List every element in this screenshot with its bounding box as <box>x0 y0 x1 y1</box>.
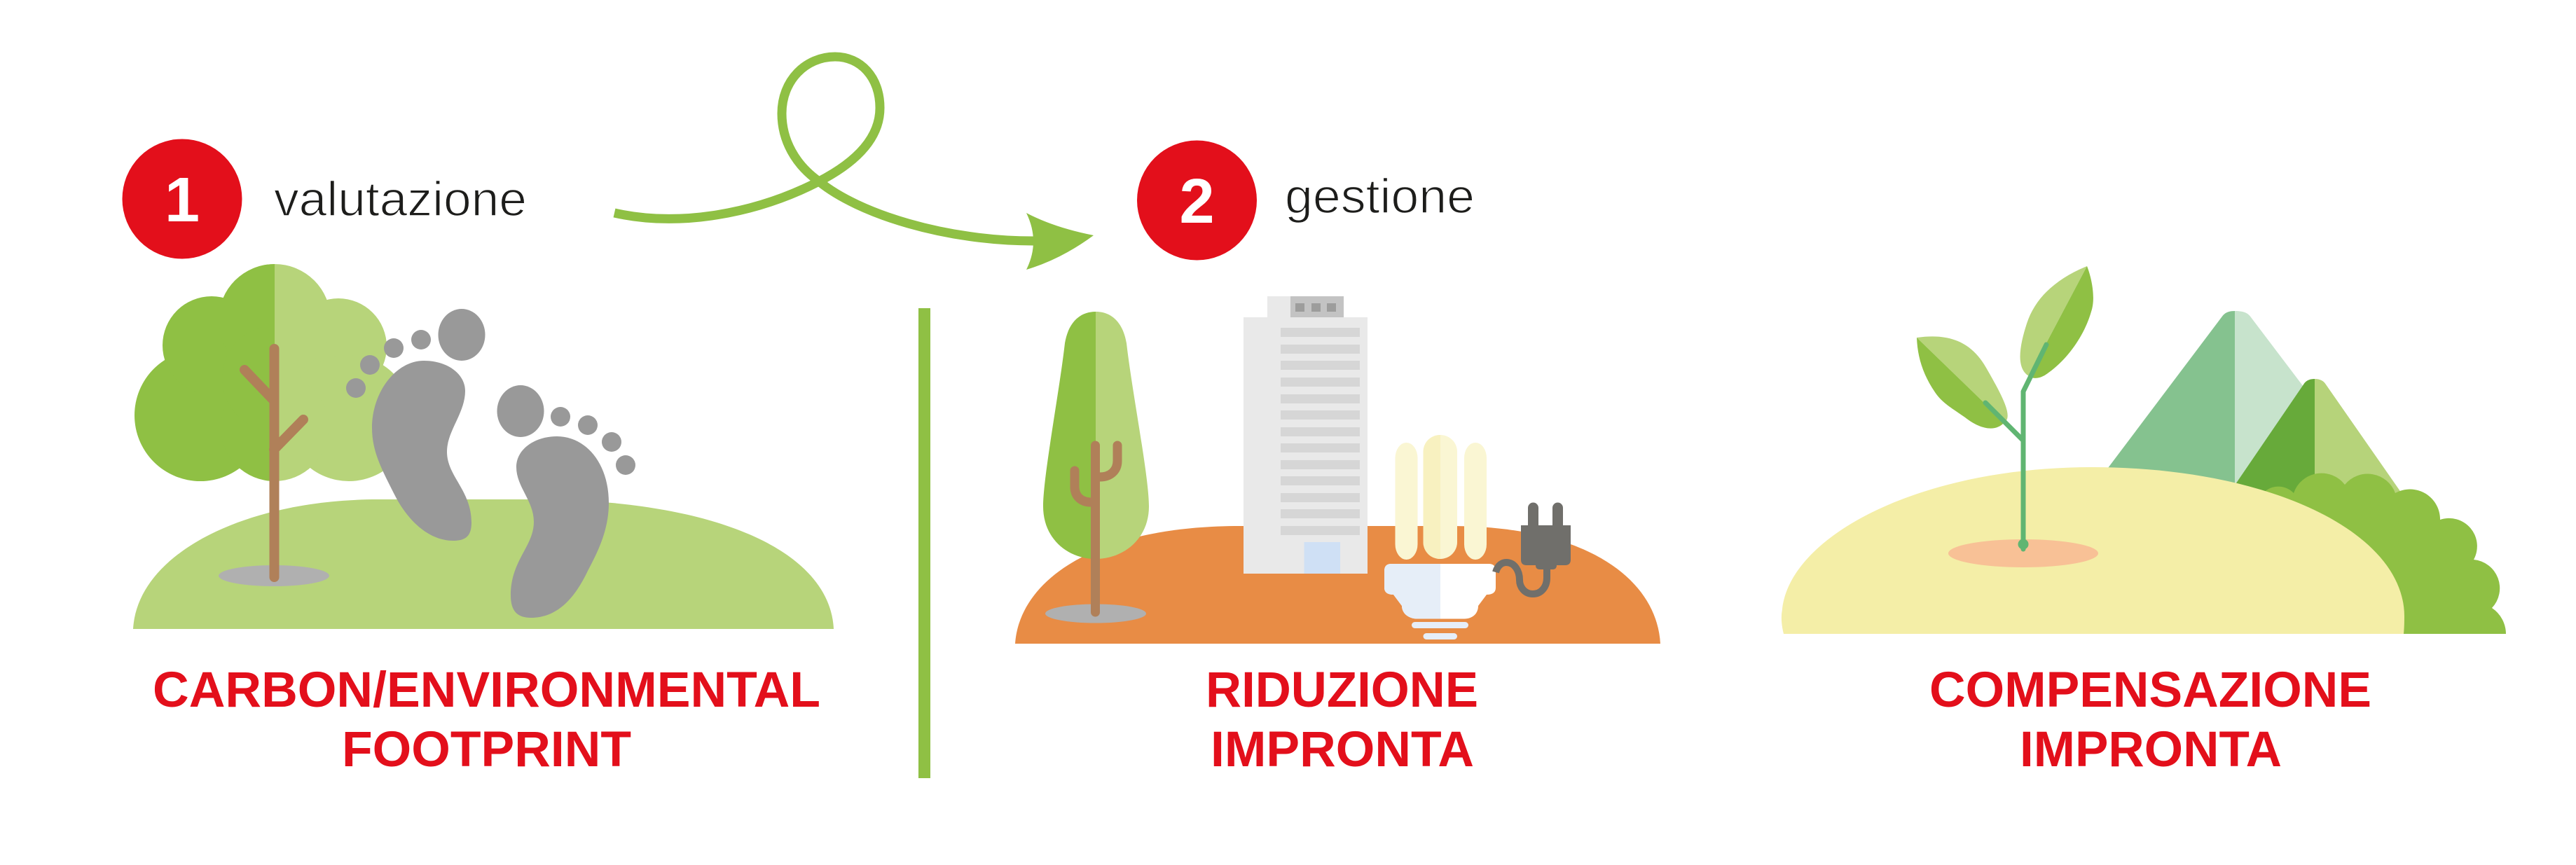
icon: bush <box>2259 473 2506 634</box>
step 1 badge: 1 <box>165 165 200 235</box>
step 2 badge: 2 <box>1179 167 1215 237</box>
icon: left footprint <box>346 309 485 541</box>
step 2 badge <box>1137 140 1257 261</box>
icon: big mountain <box>2102 311 2382 532</box>
step 1 label: valutazione: valutazione <box>274 172 527 226</box>
step 2 label: gestione: gestione <box>1285 169 1475 223</box>
heading: carbon/environmental footprint: CARBON/ENVIRONMENTAL <box>153 663 820 718</box>
ground: orange hill <box>1015 526 1660 644</box>
heading: carbon/environmental footprint <box>153 663 820 777</box>
heading: riduzione impronta: IMPRONTA <box>1211 722 1474 777</box>
icon: electric plug <box>1496 503 1571 594</box>
heading: carbon/environmental footprint: FOOTPRINT <box>342 722 631 777</box>
heading: riduzione impronta: RIDUZIONE <box>1206 663 1478 718</box>
heading: riduzione impronta <box>1206 663 1478 777</box>
heading: compensazione impronta: IMPRONTA <box>2020 722 2282 777</box>
icon: lower leaf <box>1917 336 2008 429</box>
icon: seedling stem <box>1985 345 2046 549</box>
icon: leafy tree <box>135 264 412 586</box>
step 1 badge <box>122 139 242 259</box>
icon: cypress tree <box>1043 312 1149 623</box>
ground: yellow hill <box>1782 467 2404 634</box>
icon: upper leaf <box>2020 266 2093 378</box>
panel: compensation illustration <box>1782 266 2506 634</box>
icon: soil patch <box>1948 539 2098 567</box>
icon: small mountain <box>2231 379 2403 532</box>
panel: reduction illustration <box>1015 296 1660 644</box>
looping arrow from step 1 to step 2 <box>614 57 1094 270</box>
infographic canvas <box>122 52 2506 778</box>
heading: compensazione impronta: COMPENSAZIONE <box>1929 663 2371 718</box>
icon: right footprint <box>497 385 635 618</box>
panel: carbon footprint illustration <box>133 264 834 629</box>
icon: energy saving bulb <box>1384 435 1496 639</box>
ground: green hill <box>133 499 834 629</box>
icon: office building <box>1244 296 1368 574</box>
heading: compensazione impronta <box>1929 663 2371 777</box>
vertical divider <box>918 308 930 778</box>
